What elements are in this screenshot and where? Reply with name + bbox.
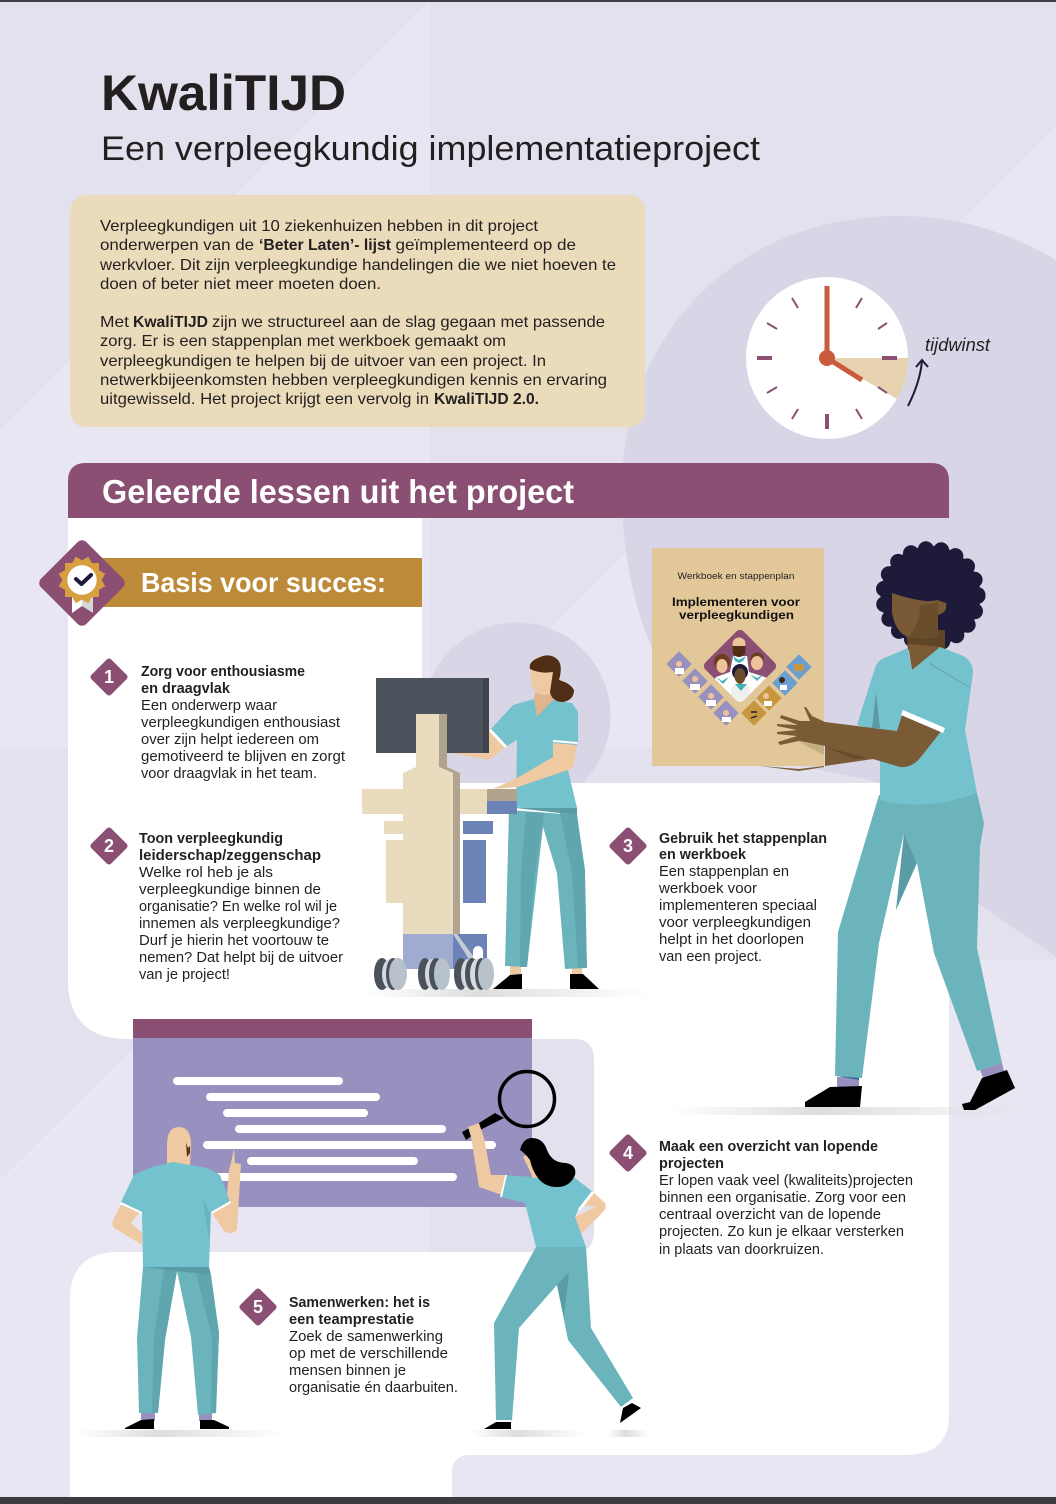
step 3: voor verpleegkundigen — [659, 915, 811, 931]
intro paragraph 2: netwerkbijeenkomsten hebben verpleegkundigen kennis en ervaring — [100, 372, 607, 389]
step 2: Welke rol heb je als — [139, 865, 273, 881]
wheels — [374, 958, 494, 990]
step 2: leiderschap/zeggenschap — [139, 848, 321, 864]
step 4: binnen een organisatie. Zorg voor een — [659, 1190, 906, 1206]
step 5: op met de verschillende — [289, 1346, 448, 1362]
step 4: centraal overzicht van de lopende — [659, 1207, 881, 1223]
label: tijdwinst: tijdwinst — [925, 335, 991, 355]
book mosaic: team diamond — [704, 630, 776, 702]
intro paragraph 2: verpleegkundigen te helpen bij de uitvoer van een project. In — [100, 353, 546, 370]
step 1: gemotiveerd te blijven en zorgt — [141, 749, 345, 765]
ground shadow — [670, 1107, 1040, 1115]
project board — [133, 1019, 532, 1207]
number badge 5: 5 — [253, 1297, 263, 1317]
step 4: projecten — [659, 1156, 724, 1172]
banner: Geleerde lessen — [68, 463, 949, 518]
intro paragraph 2 — [100, 314, 607, 408]
bottom bar — [0, 1497, 1056, 1504]
step 2: Durf je hierin het voortouw te — [139, 933, 329, 949]
intro paragraph 1: ‘Beter Laten’- lijst — [259, 237, 392, 254]
illustration: nurse at cart — [487, 655, 599, 989]
banner: Geleerde lessen: Geleerde lessen uit het project — [102, 473, 574, 510]
number badge 5 — [238, 1287, 278, 1327]
step 2 — [89, 826, 343, 983]
intro paragraph 1: doen of beter niet meer moeten doen. — [100, 276, 381, 293]
step 4: projecten. Zo kun je elkaar versterken — [659, 1224, 904, 1240]
illustration: female nurse with magnifier — [462, 1072, 650, 1437]
intro paragraph 2: zorg. Er is een stappenplan met werkboek gemaakt om — [100, 333, 506, 350]
step 2: innemen als verpleegkundige? — [139, 916, 340, 932]
number badge 2 — [89, 826, 129, 866]
step 4: Maak een overzicht van lopende — [659, 1139, 878, 1155]
number badge 1 — [89, 657, 129, 697]
ground shadow — [365, 989, 650, 997]
background blob — [622, 216, 1056, 957]
intro paragraph 2: KwaliTIJD 2.0. — [434, 391, 539, 408]
step 3: Gebruik het stappenplan — [659, 831, 827, 847]
ground shadows — [470, 1430, 585, 1437]
number badge 3 — [608, 826, 648, 866]
intro paragraph 1: onderwerpen van de — [100, 237, 254, 254]
book cover: Werkboek en stappenplan — [678, 571, 794, 582]
step 1 — [89, 657, 345, 782]
intro paragraph 1 — [99, 218, 616, 293]
intro paragraph 1: Verpleegkundigen uit 10 ziekenhuizen hebben in dit project — [100, 218, 539, 235]
number badge 1: 1 — [104, 667, 114, 687]
number badge 4: 4 — [623, 1143, 633, 1163]
step 1: voor draagvlak in het team. — [141, 766, 317, 782]
intro paragraph 1: geïmplementeerd op de — [396, 237, 576, 254]
step 4: in plaats van doorkruizen. — [659, 1242, 824, 1258]
subtitle: Een verpleegkundig implementatieproject — [101, 130, 761, 168]
step 4: Er lopen vaak veel (kwaliteits)projecten — [659, 1173, 913, 1189]
ground shadow — [75, 1430, 285, 1437]
step 3: en werkboek — [659, 847, 747, 863]
intro paragraph 2: zijn we structureel aan de slag gegaan met passende — [212, 314, 605, 331]
illustration: male nurse pointing — [75, 1127, 285, 1437]
arm and hand — [825, 712, 943, 767]
step 5 — [238, 1287, 458, 1396]
icon: clock with time gain — [746, 277, 928, 439]
intro paragraph 1: werkvloer. Dit zijn verpleegkundige handelingen die we niet hoeven te — [99, 257, 616, 274]
icon: magnifying glass — [462, 1072, 554, 1140]
step 1: Zorg voor enthousiasme — [141, 664, 305, 680]
book cover: Implementeren voor — [672, 595, 800, 609]
step 5: een teamprestatie — [289, 1312, 414, 1328]
step 1: over zijn helpt iedereen om — [141, 732, 319, 748]
number badge 4 — [608, 1133, 648, 1173]
hair — [880, 546, 980, 646]
step 5: Zoek de samenwerking — [289, 1329, 443, 1345]
book cover — [652, 548, 824, 771]
panel: introduction — [70, 195, 645, 427]
banner: Basis voor succes — [37, 538, 422, 628]
step 1: en draagvlak — [141, 681, 231, 697]
step 5: organisatie én daarbuiten. — [289, 1380, 458, 1396]
face — [906, 630, 945, 650]
step 3: implementeren speciaal — [659, 898, 817, 914]
board text lines — [173, 1077, 496, 1181]
number badge 2: 2 — [104, 836, 114, 856]
intro paragraph 2: uitgewisseld. Het project krijgt een vervolg in — [100, 391, 429, 408]
intro paragraph 2: Met — [100, 314, 130, 331]
white content area — [68, 518, 949, 1497]
step 3: van een project. — [659, 949, 762, 965]
intro paragraph 2: KwaliTIJD — [133, 314, 208, 331]
step 2: nemen? Dat helpt bij de uitvoer — [139, 950, 343, 966]
arrow: time gain — [908, 360, 928, 406]
step 5: Samenwerken: het is — [289, 1295, 430, 1311]
book cover: verpleegkundigen — [679, 608, 794, 622]
step 2: van je project! — [139, 967, 230, 983]
step 3: Een stappenplan en — [659, 864, 789, 880]
icon: badge — [37, 538, 127, 628]
book mosaic: small tiles — [666, 651, 812, 726]
step 5: mensen binnen je — [289, 1363, 406, 1379]
number badge 3: 3 — [623, 836, 633, 856]
step 3: werkboek voor — [658, 881, 757, 897]
small circle backdrop — [432, 622, 610, 783]
step 2: organisatie? En welke rol wil je — [139, 899, 337, 915]
step 1: verpleegkundigen enthousiast — [141, 715, 340, 731]
step 4 — [608, 1133, 913, 1258]
banner: Basis voor succes: Basis voor succes: — [141, 567, 386, 598]
illustration: large nurse holding book — [670, 546, 1040, 1115]
step 2: verpleegkundige binnen de — [139, 882, 321, 898]
step 2: Toon verpleegkundig — [139, 831, 283, 847]
shirt — [857, 647, 977, 805]
illustration: ultrasound cart — [362, 678, 650, 997]
title: KwaliTIJD — [101, 65, 346, 121]
step 3 — [608, 826, 827, 965]
step 3: helpt in het doorlopen — [659, 932, 804, 948]
step 1: Een onderwerp waar — [141, 698, 277, 714]
